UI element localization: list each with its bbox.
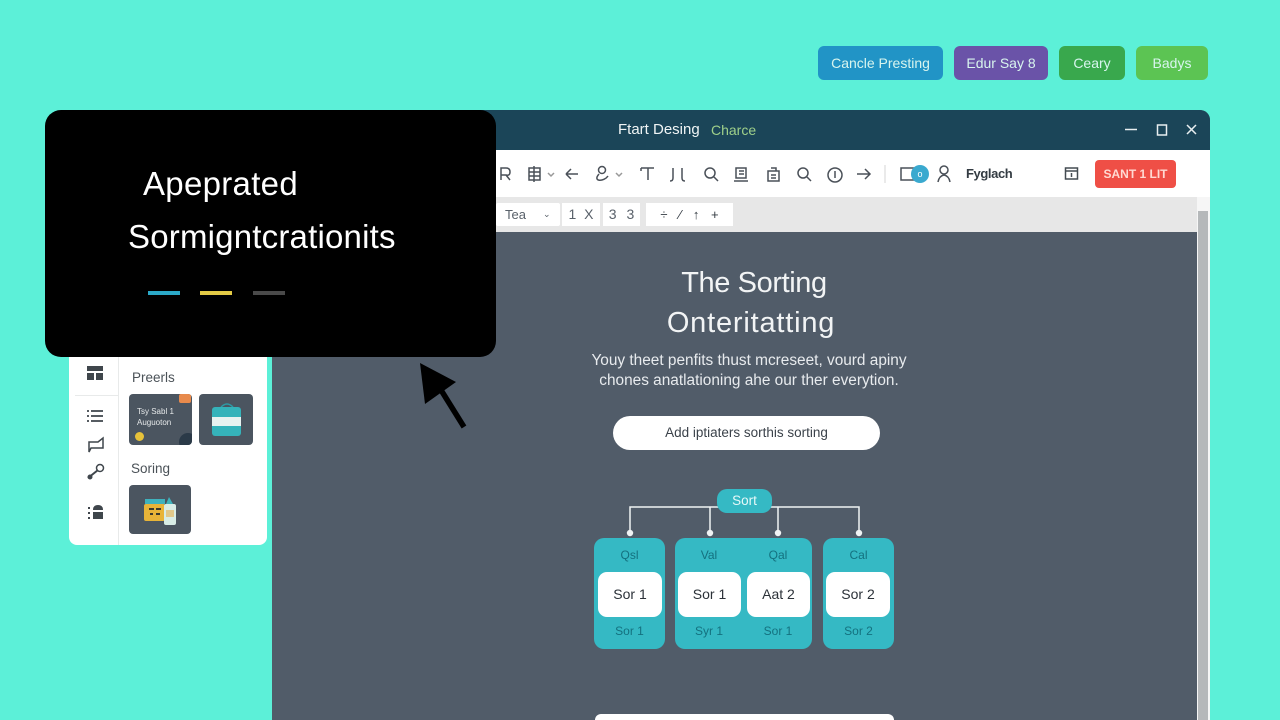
thumbnail text [137,407,174,427]
card sor 1 [598,572,662,617]
sort root node: Sort [732,493,757,508]
window controls [1125,124,1196,136]
black overlay card [45,110,496,357]
yellow dot [135,432,144,441]
alignment buttons: ÷ ∕ ↑ + [660,207,719,222]
body text [591,352,907,389]
thumbnail art [144,497,176,525]
arrow cursor [420,363,466,428]
scrollbar track [1197,197,1210,720]
label qsl: Qsl [620,548,638,562]
card sor 2: Sor 2 [841,586,875,602]
scrollbar thumb [1198,211,1208,720]
sort tree diagram [626,489,862,536]
font selector [496,203,560,226]
label val: Val [701,548,717,562]
sorting thumbnail [129,485,191,534]
footer label sor 1 second: Sor 1 [764,624,792,638]
main heading second line: Onteritatting [667,307,835,339]
thumbnail text: Auguoton [137,418,171,427]
yellow dash [200,291,232,295]
button: edur say: Edur Say 8 [966,55,1036,71]
label cal: Cal [849,548,868,562]
footer label syr 1: Syr 1 [695,624,723,638]
pill button: Add iptiaters sorthis sorting [665,425,828,440]
card sor 2 [826,572,890,617]
label qal: Qal [769,548,787,562]
column 3 [823,538,894,649]
left sidebar panel [69,340,267,545]
preset thumbnail 1 [129,394,192,445]
card aat 2 [747,572,810,617]
button: cancle presting: Cancle Presting [831,55,930,71]
orange dot [179,394,191,403]
sidebar divider [118,340,119,545]
preset thumbnail 2 [199,394,253,445]
notification badge [911,165,929,183]
section heading soring: Soring [131,461,170,476]
button: badys: Badys [1153,55,1191,71]
window subtitle: Charce [711,122,756,138]
dark corner [179,433,197,451]
number buttons: 3 3 [609,206,634,222]
format bar [272,197,1197,232]
button: ceary: Ceary [1073,55,1111,71]
font selector: ⌄ [543,209,551,219]
main heading: The Sorting [681,267,827,299]
thumbnail text: Tsy Sabl 1 [137,407,174,416]
title bar [272,110,1210,150]
toolbar [272,150,1210,197]
window title: Ftart Desing [618,121,700,138]
gray dash [253,291,285,295]
panel icon [1064,167,1078,180]
red action button [1095,160,1176,188]
notification badge: o [917,169,922,179]
blue dash [148,291,180,295]
font selector: Tea [505,207,526,222]
application window [272,110,1210,720]
button: cancle presting [818,46,943,80]
body text: chones anatlationing ahe our ther everytion. [599,372,899,389]
user name: Fyglach [966,166,1012,181]
column 2 [675,538,812,649]
size buttons: 1 X [568,206,594,222]
button: edur say [954,46,1048,80]
column 1 [594,538,665,649]
number buttons [603,203,640,226]
button: badys [1136,46,1208,80]
footer label sor 1: Sor 1 [615,624,644,638]
toolbar icons [500,165,951,183]
card sor 1 second [678,572,741,617]
overlay heading line 2: Sormigntcrationits [128,218,396,255]
card sor 1: Sor 1 [613,586,647,602]
top action buttons [818,46,1208,80]
footer label sor 2: Sor 2 [844,624,873,638]
red action button: SANT 1 LIT [1103,167,1168,181]
tree connectors [626,506,862,536]
card aat 2: Aat 2 [762,586,795,602]
bag icon [212,403,241,436]
section heading preerls: Preerls [132,370,175,385]
card sor 1 second: Sor 1 [693,586,726,602]
button: ceary [1059,46,1125,80]
alignment buttons [646,203,733,226]
sort root node [717,489,772,513]
pill button [613,416,880,450]
sidebar icons [87,366,104,519]
bottom pill [595,714,894,720]
overlay heading line 1: Apeprated [143,165,298,202]
sidebar separator [75,395,118,396]
body text: Youy theet penfits thust mcreseet, vourd apiny [591,352,907,369]
size buttons [562,203,600,226]
